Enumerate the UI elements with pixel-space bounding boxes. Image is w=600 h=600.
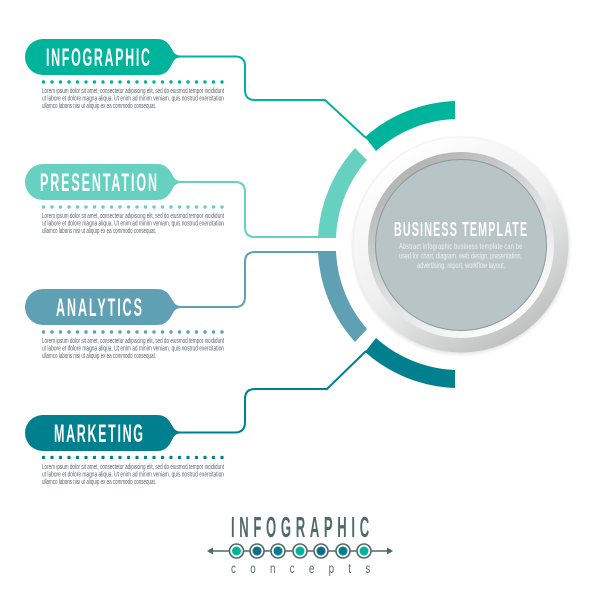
heading: infographic: INFOGRAPHIC — [46, 44, 150, 72]
bezel — [368, 152, 554, 338]
body text — [42, 213, 224, 235]
timeline dot centres — [232, 546, 368, 556]
body text — [42, 88, 224, 110]
body text: ullamco laboris nisi ut aliquip ex ea commodo consequat. — [42, 479, 156, 486]
connector line: infographic — [172, 56, 366, 138]
circle body text — [399, 243, 522, 270]
item: marketing — [25, 351, 366, 486]
body text: Lorem ipsum dolor sit amet, consectetur adipiscing elit, sed do eiusmod tempor incididunt — [42, 338, 224, 345]
heading: marketing: MARKETING — [54, 420, 143, 448]
item: infographic — [25, 39, 366, 138]
outer rim — [354, 138, 568, 352]
dotted divider — [44, 80, 223, 84]
heading: analytics: ANALYTICS — [56, 294, 142, 322]
item: presentation — [25, 164, 325, 237]
body text: Lorem ipsum dolor sit amet, consectetur adipiscing elit, sed do eiusmod tempor incididunt — [42, 464, 224, 471]
timeline dots — [230, 544, 371, 558]
footer logo — [207, 511, 393, 576]
circle body text: Abstract infographic business template can be — [399, 243, 522, 251]
pill: marketing — [25, 415, 182, 451]
body text: Lorem ipsum dolor sit amet, consectetur adipiscing elit, sed do eiusmod tempor incididunt — [42, 88, 224, 95]
item: analytics — [25, 252, 325, 360]
circle shadow — [350, 135, 572, 357]
arc segment: upper left — [318, 148, 367, 238]
timeline arrow — [207, 548, 393, 554]
body text: ullamco laboris nisi ut aliquip ex ea commodo consequat. — [42, 103, 156, 110]
body text: ut labore et dolore magna aliqua. Ut enim ad minim veniam, quis nostrud exercitation — [42, 96, 224, 102]
body text: ullamco laboris nisi ut aliquip ex ea commodo consequat. — [42, 228, 156, 235]
body text: ut labore et dolore magna aliqua. Ut enim ad minim veniam, quis nostrud exercitation — [42, 472, 224, 478]
circle heading: BUSINESS TEMPLATE — [394, 218, 527, 241]
connector line: presentation — [172, 182, 325, 237]
pill: presentation — [25, 164, 182, 200]
connector line: marketing — [172, 351, 366, 432]
body text: ut labore et dolore magna aliqua. Ut enim ad minim veniam, quis nostrud exercitation — [42, 220, 224, 228]
dotted divider — [44, 330, 223, 334]
body text: ullamco laboris nisi ut aliquip ex ea commodo consequat. — [42, 353, 156, 360]
pill: analytics — [25, 289, 182, 325]
circle body text: used for chart, diagram, web design, presentation, — [399, 253, 522, 261]
body text: ut labore et dolore magna aliqua. Ut enim ad minim veniam, quis nostrud exercitation — [42, 346, 224, 352]
body text — [42, 338, 224, 360]
arc segment: bottom — [365, 338, 455, 388]
heading: presentation: PRESENTATION — [40, 169, 157, 197]
connector line: analytics — [172, 252, 325, 307]
arc segment: lower left — [318, 251, 367, 342]
arc segment: top — [365, 101, 455, 151]
footer title: INFOGRAPHIC — [231, 511, 369, 543]
footer subtitle: concepts — [231, 560, 370, 576]
dotted divider — [44, 456, 223, 459]
circle body text: advertising, report, workflow layout. — [417, 262, 505, 270]
dotted divider — [44, 205, 223, 209]
central circle — [350, 135, 572, 357]
body text — [42, 464, 224, 486]
pill: infographic — [25, 39, 182, 75]
body text: Lorem ipsum dolor sit amet, consectetur adipiscing elit, sed do eiusmod tempor incididunt — [42, 213, 224, 220]
inner disc — [376, 160, 546, 330]
